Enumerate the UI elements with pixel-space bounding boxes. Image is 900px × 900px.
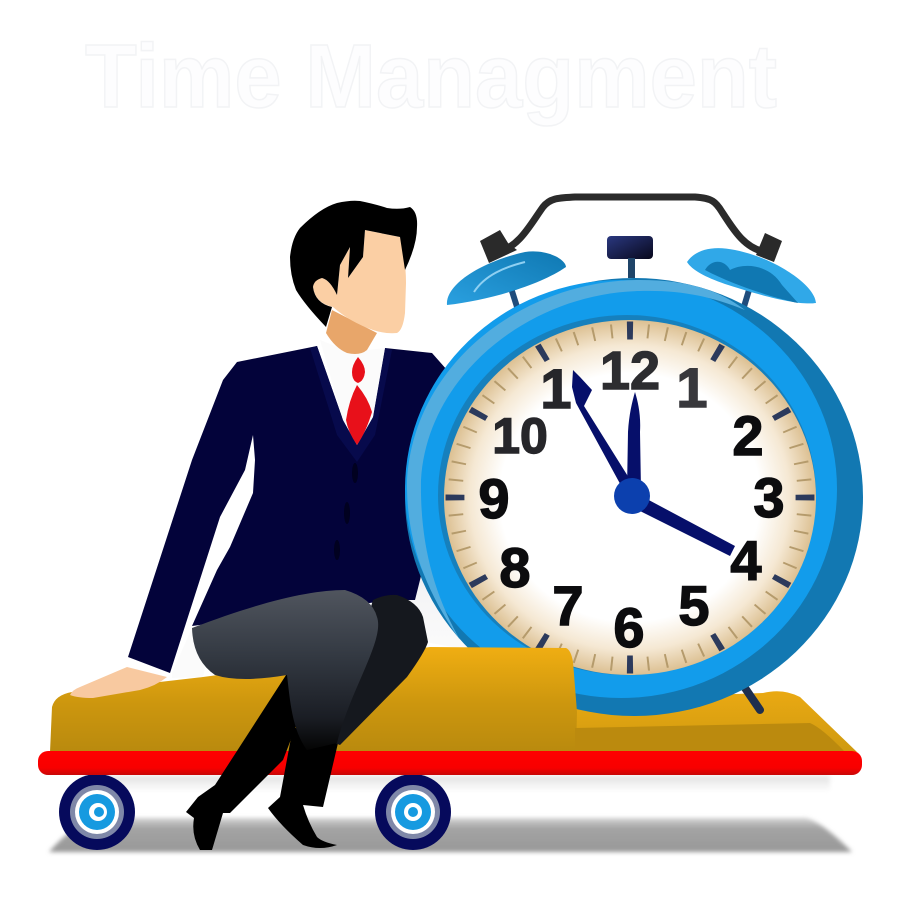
- clock numerals: 1: [676, 356, 708, 419]
- clock foot: [745, 688, 760, 710]
- title: Time Managment: [85, 27, 777, 127]
- clock numerals: 6: [613, 596, 645, 659]
- businessman lower body: [70, 590, 428, 850]
- hour ticks: [455, 330, 805, 664]
- left bell knob: [480, 230, 517, 263]
- clock numerals: 8: [499, 536, 531, 599]
- clock hands: [572, 370, 735, 556]
- left bell: [447, 251, 566, 305]
- clock numerals: [478, 341, 785, 659]
- hair: [290, 201, 417, 327]
- platform lower right step: [575, 723, 845, 752]
- clock numerals: 3: [753, 466, 785, 529]
- right bell: [687, 248, 816, 303]
- clock handle: [497, 197, 765, 253]
- clock outer ring: [405, 278, 863, 716]
- neck: [326, 310, 377, 354]
- clock numerals: 1: [540, 357, 572, 420]
- trousers thigh: [192, 590, 378, 750]
- clock numerals: 9: [478, 467, 510, 530]
- far knee: [315, 595, 428, 745]
- businessman upper body: [128, 201, 460, 673]
- left boot leg: [186, 672, 310, 850]
- right leg and shoe: [268, 727, 338, 848]
- ground shadow: [49, 776, 852, 852]
- left wheel: [59, 774, 135, 850]
- clock numerals: 5: [678, 574, 710, 637]
- top button: [607, 236, 653, 278]
- face and ear: [313, 230, 406, 333]
- white shirt gap: [172, 628, 205, 678]
- jacket buttons: [334, 463, 358, 560]
- minor ticks: [455, 330, 805, 664]
- shirt collar: [320, 340, 385, 445]
- platform main gold block: [50, 647, 577, 752]
- clock numerals: 10: [492, 408, 548, 464]
- platform right end: [570, 691, 857, 752]
- clock numerals: 7: [552, 574, 584, 637]
- clock face: [444, 320, 816, 675]
- red bar: [38, 751, 862, 775]
- right bell knob: [756, 233, 782, 262]
- jacket: [128, 346, 460, 673]
- clock numerals: 12: [600, 341, 660, 401]
- clock numerals: 2: [732, 404, 764, 467]
- red tie: [346, 357, 372, 445]
- hand: [70, 667, 167, 698]
- bell posts: [511, 288, 749, 310]
- alarm clock: [405, 197, 863, 716]
- silver backdrop beside torso: [388, 505, 470, 650]
- right wheel: [375, 774, 451, 850]
- clock numerals: 4: [730, 529, 762, 592]
